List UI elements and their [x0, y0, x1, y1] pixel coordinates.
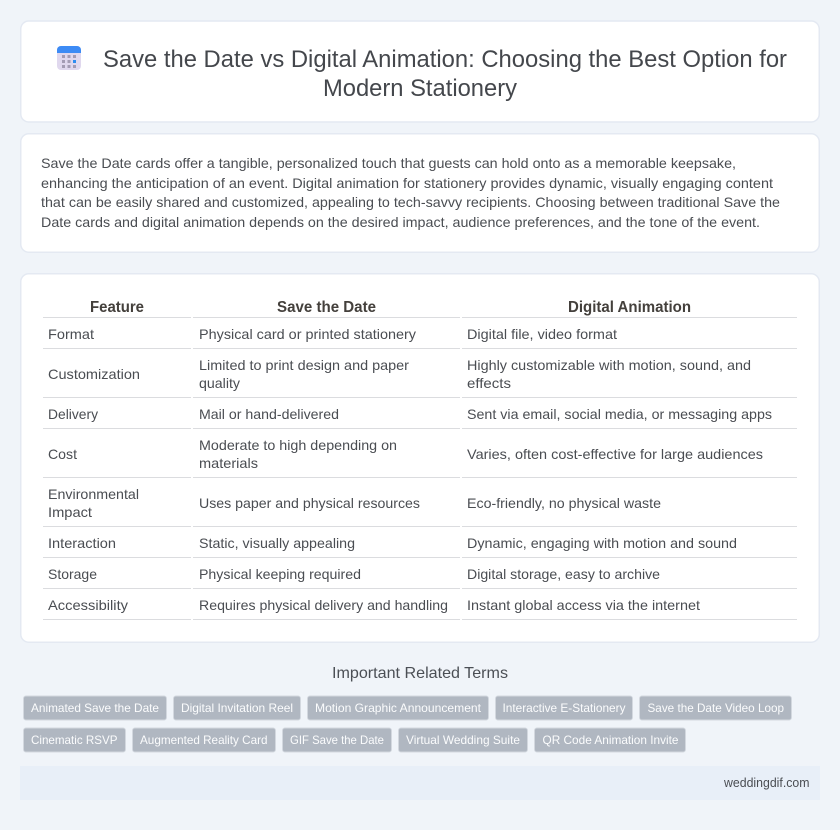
panel: comparison table — [21, 274, 819, 642]
row: Accessibility: Accessibility — [48, 597, 128, 613]
row: Format: Digital file, video format — [467, 326, 617, 342]
row: Environmental Impact: Eco-friendly, no physical waste — [467, 495, 661, 511]
row: Delivery: Mail or hand-delivered — [199, 406, 339, 422]
row: Cost: Varies, often cost-effective for large audiences — [467, 446, 763, 462]
tags: related terms: Save the Date Video Loop — [648, 701, 784, 715]
row: Interaction: Static, visually appealing — [199, 535, 355, 551]
row: Interaction: Interaction — [48, 535, 116, 551]
tags: related terms: Cinematic RSVP — [31, 733, 118, 747]
tags: related terms: Digital Invitation Reel — [181, 701, 293, 715]
row: Customization: quality — [199, 375, 240, 391]
text block: description: that can be easily shared and customized, appealing to tech-savvy recipients. Choosing between traditional Save the — [41, 194, 780, 210]
row: Cost: materials — [199, 455, 258, 471]
row: Cost: Cost — [48, 446, 77, 462]
row: Cost: Moderate to high depending on — [199, 437, 397, 453]
tags: related terms: Augmented Reality Card — [140, 733, 268, 747]
row: Storage: Storage — [48, 566, 97, 582]
row: Accessibility: Requires physical delivery and handling — [199, 597, 448, 613]
row: Accessibility — [48, 597, 700, 613]
tags: related terms: Interactive E-Stationery — [502, 701, 626, 715]
row: Delivery — [48, 406, 772, 422]
row: Customization: Highly customizable with motion, sound, and — [467, 357, 751, 373]
row: Storage: Digital storage, easy to archive — [467, 566, 660, 582]
tags: related terms: GIF Save the Date — [290, 733, 384, 747]
footer: site name: weddingdif.com — [723, 775, 810, 790]
row: Storage: Physical keeping required — [199, 566, 361, 582]
row: Format — [48, 326, 617, 342]
row: Customization: effects — [467, 375, 511, 391]
title: Save the Date vs Digital Animation: Choosing the Best Option for — [103, 46, 787, 73]
row: Interaction — [48, 535, 737, 551]
row: Environmental Impact: Impact — [48, 504, 92, 520]
tags: related terms: Virtual Wedding Suite — [406, 733, 520, 747]
text block: description: Save the Date cards offer a tangible, personalized touch that guests can hold onto as a memorable keepsake, — [41, 155, 736, 171]
row: Environmental Impact: Uses paper and physical resources — [199, 495, 420, 511]
row: Storage — [48, 566, 660, 582]
tags: related terms: QR Code Animation Invite — [542, 733, 679, 747]
table header: Digital Animation — [568, 299, 691, 316]
row: Delivery: Sent via email, social media, or messaging apps — [467, 406, 772, 422]
row: Environmental Impact — [48, 486, 661, 520]
row: Format: Format — [48, 326, 94, 342]
panel: title header — [21, 21, 819, 122]
footer — [20, 766, 820, 800]
row: Delivery: Delivery — [48, 406, 98, 422]
row: Format: Physical card or printed stationery — [199, 326, 416, 342]
tags: related terms: Animated Save the Date — [31, 701, 159, 715]
title — [103, 46, 787, 102]
tags: related terms — [24, 696, 792, 752]
tags: related terms: Motion Graphic Announcement — [315, 701, 482, 715]
row: Cost — [48, 437, 763, 471]
row: Environmental Impact: Environmental — [48, 486, 139, 502]
heading: related terms: Important Related Terms — [332, 665, 508, 682]
row: Accessibility: Instant global access via the internet — [467, 597, 700, 613]
row: Customization: Customization — [48, 366, 140, 382]
row: Customization — [48, 357, 751, 391]
table header: Save the Date — [277, 299, 376, 316]
table header: Feature — [90, 299, 144, 316]
panel: description — [21, 134, 819, 252]
row: Customization: Limited to print design and paper — [199, 357, 409, 373]
text block: description — [41, 155, 780, 230]
table header — [90, 299, 691, 316]
text block: description: enhancing the anticipation of an event. Digital animation for stationery provides dynamic, visually engaging content — [41, 175, 773, 191]
icon: calendar — [57, 46, 81, 70]
title: Modern Stationery — [323, 75, 517, 102]
text block: description: Date cards and digital animation depends on the desired impact, audience preferences, and the tone of the event. — [41, 214, 760, 230]
row: Interaction: Dynamic, engaging with motion and sound — [467, 535, 737, 551]
